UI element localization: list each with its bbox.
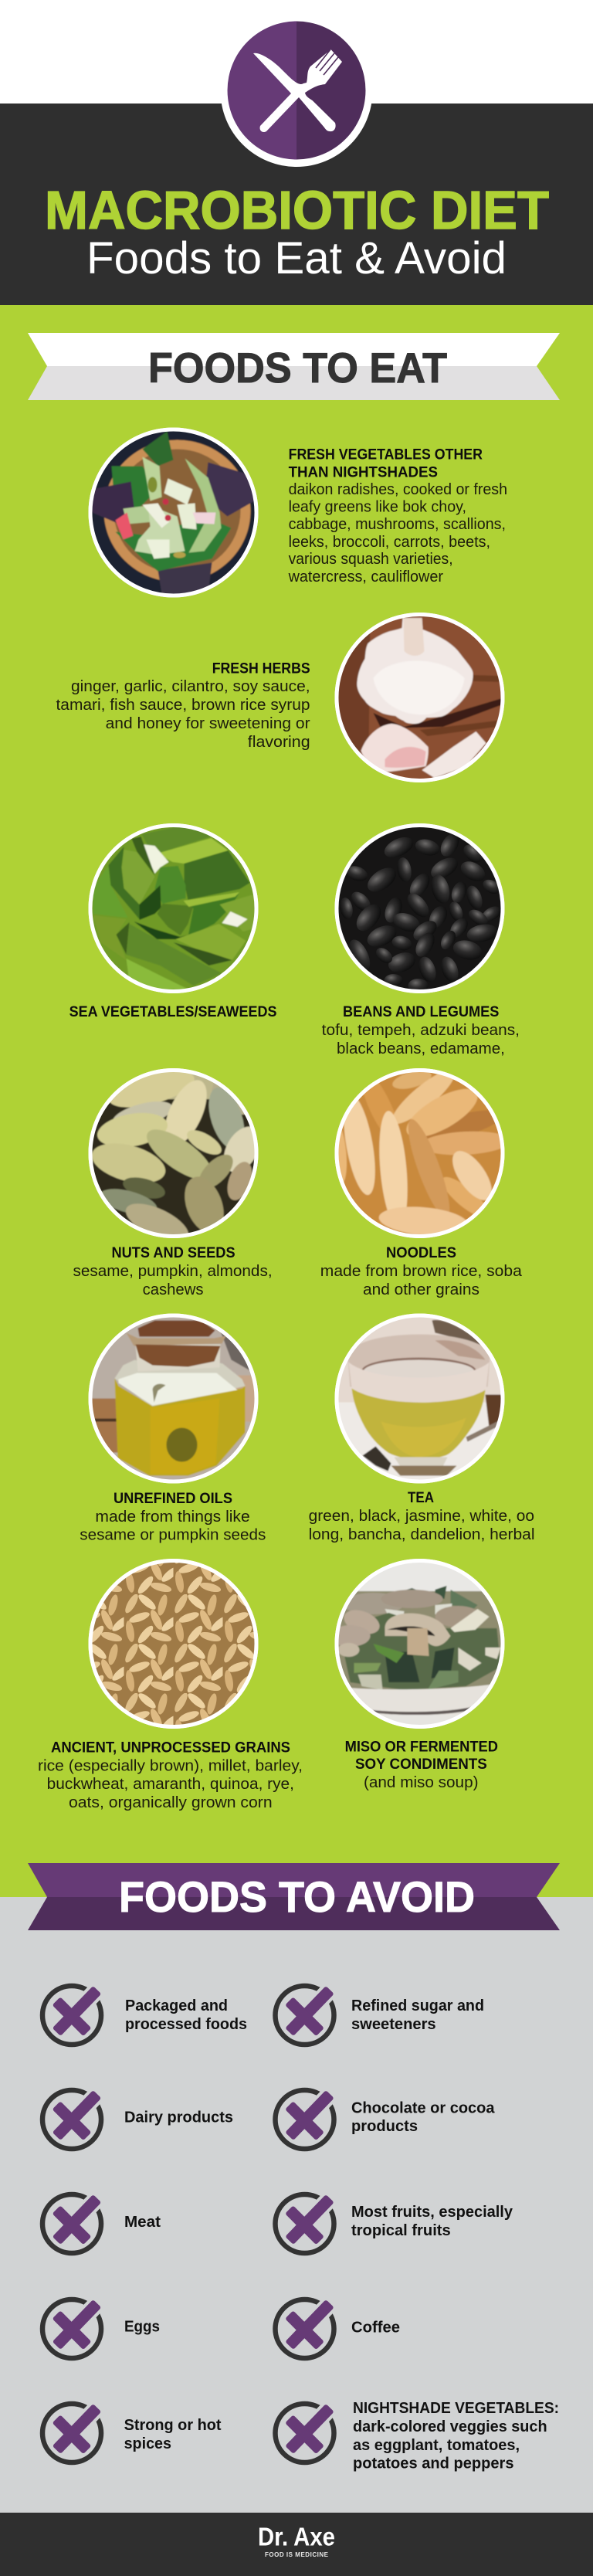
text: noodles: and other grains <box>363 1281 479 1298</box>
text: fresh vegetables: cabbage, mushrooms, scallions, <box>289 516 506 533</box>
text: fresh vegetables: leeks, broccoli, carrots, beets, <box>289 534 490 551</box>
title: MACROBIOTIC DIET <box>45 180 549 240</box>
avoid item: meat <box>42 2189 161 2253</box>
panel: foods to eat <box>0 305 593 1897</box>
text: fresh vegetables: watercress, cauliflower <box>288 568 443 585</box>
photo: miso soup <box>330 1559 505 1730</box>
text: miso: (and miso soup) <box>364 1774 479 1791</box>
text: nuts and seeds: cashews <box>143 1281 204 1298</box>
text: beans and legumes: black beans, edamame, <box>337 1040 505 1057</box>
food item: noodles <box>320 1063 523 1298</box>
avoid item: dairy <box>42 2085 233 2149</box>
text: tea <box>309 1489 534 1543</box>
text: fresh herbs: and honey for sweetening or <box>106 715 310 732</box>
food item: sea vegetables <box>69 823 276 1020</box>
avoid item: spices: spices <box>124 2435 171 2452</box>
text: fresh herbs: tamari, fish sauce, brown rice syrup <box>56 697 310 714</box>
text: miso <box>345 1738 498 1791</box>
text: fresh herbs: flavoring <box>248 734 310 751</box>
text: fresh vegetables: various squash varieties, <box>289 551 453 568</box>
panel: foods to avoid <box>0 1863 593 2513</box>
avoid item: meat: Meat <box>124 2214 161 2231</box>
text: fresh vegetables: leafy greens like bok choy, <box>289 499 466 516</box>
text: fresh vegetables: THAN NIGHTSHADES <box>289 463 438 480</box>
avoid item: dairy: Dairy products <box>124 2109 233 2126</box>
food item: fresh vegetables <box>88 428 507 598</box>
text: ancient grains: ANCIENT, UNPROCESSED GRAINS <box>51 1739 290 1756</box>
avoid item: chocolate: Chocolate or cocoa <box>351 2100 495 2117</box>
photo: pumpkin seeds <box>88 1068 258 1238</box>
avoid item: most fruits: Most fruits, especially <box>351 2204 513 2221</box>
banner: foods to avoid <box>28 1863 560 1930</box>
text: beans and legumes: BEANS AND LEGUMES <box>343 1003 499 1020</box>
text: miso: SOY CONDIMENTS <box>355 1756 487 1773</box>
food item: nuts and seeds <box>73 1064 273 1298</box>
avoid item: chocolate: products <box>351 2118 418 2135</box>
text: nuts and seeds: NUTS AND SEEDS <box>111 1244 236 1261</box>
banner: foods to eat: FOODS TO EAT <box>148 344 447 392</box>
avoid item: most fruits: tropical fruits <box>351 2222 451 2239</box>
text: fresh herbs <box>56 660 310 751</box>
avoid item: spices <box>42 2398 222 2462</box>
text: unrefined oils <box>80 1490 266 1544</box>
text: ancient grains: oats, organically grown corn <box>69 1794 273 1811</box>
text: beans and legumes <box>322 1003 520 1057</box>
photo: brown rice <box>88 1559 258 1729</box>
text: unrefined oils: sesame or pumpkin seeds <box>80 1527 266 1544</box>
logo: Dr. Axe: Dr. Axe <box>258 2523 335 2551</box>
avoid item: refined sugar: Refined sugar and <box>351 1997 484 2014</box>
avoid item: spices: Strong or hot <box>124 2417 222 2434</box>
photo: oil bottle <box>88 1313 258 1483</box>
panel: footer <box>0 2513 593 2576</box>
avoid item: packaged foods: processed foods <box>125 2016 247 2033</box>
avoid item: nightshade vegetables: as eggplant, tomatoes, <box>353 2437 520 2454</box>
text: fresh vegetables: daikon radishes, cooked or fresh <box>289 481 507 498</box>
avoid item: packaged foods <box>42 1980 247 2045</box>
photo: seaweed <box>88 823 258 993</box>
logo: Dr. Axe: FOOD IS MEDICINE <box>265 2551 329 2558</box>
text: miso: MISO OR FERMENTED <box>345 1738 498 1755</box>
text: noodles: made from brown rice, soba <box>320 1263 523 1280</box>
text: sea vegetables: SEA VEGETABLES/SEAWEEDS <box>69 1003 276 1020</box>
icon: crossed knife and fork badge <box>221 15 372 167</box>
text: unrefined oils: UNREFINED OILS <box>114 1490 232 1507</box>
photo: tea cup <box>335 1313 505 1483</box>
text: fresh herbs: FRESH HERBS <box>212 660 310 677</box>
text: tea: TEA <box>408 1489 434 1506</box>
food item: ancient grains <box>38 1559 303 1811</box>
text: tea: green, black, jasmine, white, oo <box>309 1508 534 1525</box>
food item: fresh herbs <box>56 613 505 782</box>
text: fresh herbs: ginger, garlic, cilantro, soy sauce, <box>71 678 310 695</box>
avoid item: coffee: Coffee <box>351 2320 400 2337</box>
text: beans and legumes: tofu, tempeh, adzuki beans, <box>322 1022 520 1039</box>
avoid item: refined sugar <box>275 1980 484 2045</box>
avoid item: packaged foods: Packaged and <box>125 1997 228 2014</box>
photo: rice noodles <box>335 1068 505 1238</box>
avoid item: nightshade vegetables: NIGHTSHADE VEGETABLES: <box>353 2400 559 2417</box>
avoid item: eggs <box>42 2294 160 2358</box>
text: ancient grains <box>38 1739 303 1811</box>
banner: foods to eat <box>28 333 560 400</box>
food item: miso <box>330 1559 505 1791</box>
text: unrefined oils: made from things like <box>95 1509 250 1526</box>
avoid item: nightshade vegetables: potatoes and peppers <box>353 2456 514 2472</box>
text: ancient grains: rice (especially brown), millet, barley, <box>38 1758 303 1775</box>
photo: black beans <box>335 823 505 993</box>
text: nuts and seeds: sesame, pumpkin, almonds, <box>73 1263 273 1280</box>
avoid item: nightshade vegetables: dark-colored veggies such <box>353 2418 547 2435</box>
photo: salad bowl <box>88 428 258 598</box>
avoid item: eggs: Eggs <box>124 2319 160 2336</box>
text: noodles <box>320 1244 523 1298</box>
banner: foods to avoid: FOODS TO AVOID <box>119 1872 475 1921</box>
avoid item: chocolate <box>275 2085 495 2149</box>
food item: unrefined oils <box>80 1313 266 1544</box>
panel: header <box>0 15 593 305</box>
photo: garlic <box>335 613 505 782</box>
text: ancient grains: buckwheat, amaranth, quinoa, rye, <box>47 1776 294 1793</box>
avoid item: refined sugar: sweeteners <box>351 2016 436 2033</box>
text: noodles: NOODLES <box>386 1244 456 1261</box>
food item: beans and legumes <box>322 823 520 1057</box>
avoid item: nightshade vegetables <box>275 2398 559 2472</box>
text: fresh vegetables <box>288 446 507 585</box>
food item: tea <box>309 1313 534 1543</box>
subtitle: Foods to Eat & Avoid <box>86 233 507 283</box>
text: fresh vegetables: FRESH VEGETABLES OTHER <box>289 446 483 463</box>
text: nuts and seeds <box>73 1244 273 1298</box>
text: tea: long, bancha, dandelion, herbal <box>309 1526 534 1543</box>
avoid item: most fruits <box>275 2189 513 2253</box>
avoid item: coffee <box>275 2294 400 2358</box>
